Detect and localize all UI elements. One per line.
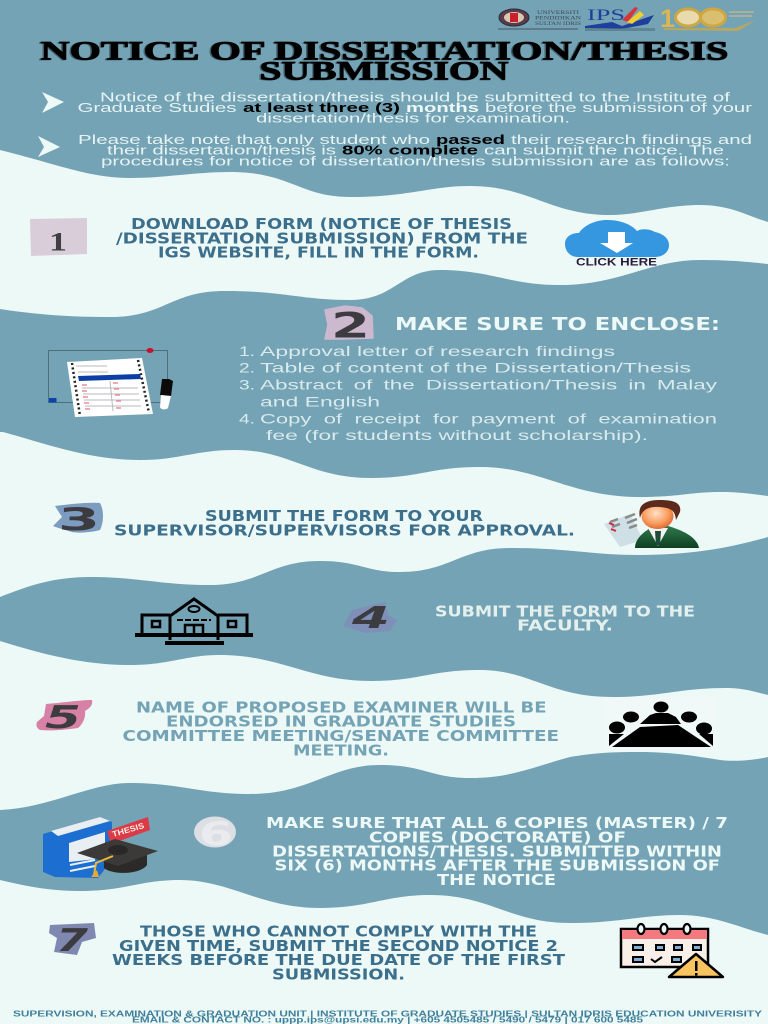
step 3 text: SUBMIT THE FORM TO YOUR [205, 508, 484, 525]
icon: thesis book and graduation cap [43, 817, 158, 878]
number badge 6 [194, 815, 236, 853]
logo: university crest [499, 9, 529, 26]
step 6 [43, 815, 728, 889]
list of documents to enclose: 3. [239, 376, 255, 392]
icon: faculty building [135, 599, 253, 643]
list of documents to enclose: 4. [239, 410, 255, 426]
step 2 [48, 306, 720, 443]
step 6 wave band [0, 752, 768, 935]
footer contact text [13, 1009, 763, 1024]
step 7 text: WEEKS BEFORE THE DUE DATE OF THE FIRST [112, 952, 566, 969]
text: eligibility paragraph: procedures for notice of dissertation/thesis submission are as follows: [101, 154, 730, 168]
step 3 text [114, 508, 575, 539]
step 4 wave band [0, 537, 768, 697]
list of documents to enclose: Approval letter of research findings [260, 343, 615, 359]
text: submission deadline paragraph [78, 91, 752, 126]
logo: 100 years [660, 5, 756, 33]
logo: university wordmark: SULTAN IDRIS [535, 21, 581, 27]
step 1 [30, 216, 669, 269]
number badge 7: 7 [56, 923, 89, 959]
list of documents to enclose: Table of content of the Dissertation/Thesis [260, 360, 691, 376]
icon: thesis book and graduation cap: THESIS [111, 821, 146, 839]
text: submission deadline paragraph: Graduate Studies [78, 101, 236, 115]
step 5 text: COMMITTEE MEETING/SENATE COMMITTEE [122, 728, 559, 745]
footer contact text: SUPERVISION, EXAMINATION & GRADUATION UNIT | INSTITUTE OF GRADUATE STUDIES | SULTAN IDRIS EDUCATION UNIVERISITY [13, 1009, 763, 1018]
logo: university wordmark [498, 10, 581, 30]
step 6 text: SIX (6) MONTHS AFTER THE SUBMISSION OF [274, 858, 720, 875]
list of documents to enclose: Copy of receipt for payment of examination [260, 410, 717, 426]
text: submission deadline paragraph: months [406, 101, 479, 115]
step 5 text: MEETING. [293, 742, 389, 759]
number badge 2 [325, 306, 373, 346]
logo: IPS [585, 7, 655, 31]
text: eligibility paragraph: 80% complete [342, 144, 478, 158]
step 5 [36, 697, 718, 759]
number badge 3: 3 [58, 502, 100, 538]
title: SUBMISSION [258, 56, 508, 86]
step 7 text: GIVEN TIME, SUBMIT THE SECOND NOTICE 2 [119, 938, 558, 955]
logo: IPS: IPS [587, 7, 625, 24]
text: submission deadline paragraph: Notice of the dissertation/thesis should be submitted to the Institute of [100, 91, 731, 105]
logos row [498, 5, 756, 33]
logo: 100 years: 1 [660, 5, 675, 33]
step 3 text: SUPERVISOR/SUPERVISORS FOR APPROVAL. [114, 522, 575, 539]
title: NOTICE OF DISSERTATION/THESIS [39, 36, 727, 66]
step 1 text [116, 216, 528, 262]
step 2 heading: MAKE SURE TO ENCLOSE: [395, 314, 720, 335]
step 5 text: NAME OF PROPOSED EXAMINER WILL BE [136, 700, 546, 717]
step 7 text: SUBMISSION. [272, 967, 405, 984]
step 4 [135, 599, 695, 643]
step 7 text [112, 924, 566, 984]
text: eligibility paragraph: their research findings and [511, 133, 752, 147]
arrow: first intro bullet [42, 92, 64, 113]
list of documents to enclose [239, 343, 717, 443]
text: submission deadline paragraph: at least three (3) [243, 101, 400, 115]
step 6 text: COPIES (DOCTORATE) OF [369, 829, 626, 846]
step 6 text [266, 815, 728, 889]
list of documents to enclose: fee (for students without scholarship). [266, 427, 648, 443]
number badge 4: 4 [350, 601, 390, 636]
list of documents to enclose: 2. [239, 360, 255, 376]
text: eligibility paragraph [78, 133, 752, 168]
text: eligibility paragraph: can submit the notice. The [484, 144, 724, 158]
step 1 text: IGS WEBSITE, FILL IN THE FORM. [158, 245, 479, 262]
icon: calendar with warning [621, 924, 723, 977]
number badge 5 [36, 700, 92, 736]
title [39, 35, 728, 86]
icon: download cloud: CLICK HERE [576, 257, 657, 269]
number badge 4 [343, 601, 397, 636]
header wave band [0, 0, 768, 222]
icon: committee meeting table [604, 697, 718, 752]
step 5 text [122, 700, 559, 759]
step 2 wave band [0, 260, 768, 497]
number badge 1 [30, 218, 87, 256]
text: eligibility paragraph: their dissertation/thesis is [107, 144, 336, 158]
number badge 2: 2 [331, 306, 370, 346]
step 4 text [435, 604, 695, 635]
step 7 [49, 923, 723, 984]
logo: university wordmark: PENDIDIKAN [535, 16, 581, 22]
step 1 text: DOWNLOAD FORM (NOTICE OF THESIS [131, 216, 512, 233]
step 4 text: SUBMIT THE FORM TO THE [435, 604, 695, 621]
number badge 6: 6 [199, 815, 233, 853]
step 1 text: /DISSERTATION SUBMISSION) FROM THE [116, 230, 528, 247]
text: submission deadline paragraph: dissertation/thesis for examination. [256, 112, 570, 126]
number badge 5: 5 [45, 700, 81, 736]
number badge 3 [53, 502, 103, 538]
text: eligibility paragraph: Please take note that only student who [78, 133, 430, 147]
number badge 1: 1 [49, 228, 67, 256]
arrow: second intro bullet [38, 136, 60, 157]
text: submission deadline paragraph: before the submission of your [485, 101, 752, 115]
step 6 text: THE NOTICE [437, 872, 556, 889]
list of documents to enclose: 1. [239, 343, 255, 359]
icon: checklist form and marker [48, 348, 173, 417]
title: NOTICE OF DISSERTATION/THESIS [40, 35, 728, 65]
step 4 text: FACULTY. [517, 618, 613, 635]
number badge 7 [49, 923, 96, 959]
step 6 text: MAKE SURE THAT ALL 6 COPIES (MASTER) / 7 [266, 815, 728, 832]
step 6 text: DISSERTATIONS/THESIS. SUBMITTED WITHIN [272, 844, 722, 861]
list of documents to enclose: Abstract of the Dissertation/Thesis in Malay [260, 376, 717, 392]
step 5 text: ENDORSED IN GRADUATE STUDIES [166, 714, 516, 731]
icon: supervisor with form [604, 500, 699, 548]
list of documents to enclose: and English [260, 394, 380, 410]
logo: university wordmark: UNIVERSITI [537, 10, 579, 16]
step 3 [53, 500, 699, 548]
step 7 text: THOSE WHO CANNOT COMPLY WITH THE [140, 924, 537, 941]
icon: download cloud [565, 220, 669, 269]
text: eligibility paragraph: passed [436, 133, 505, 147]
title: SUBMISSION [260, 55, 508, 85]
